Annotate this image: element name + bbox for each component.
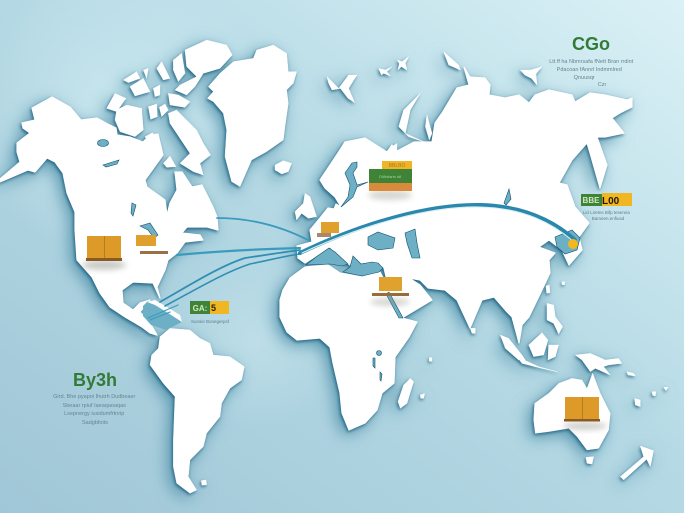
crate: North America small (136, 235, 168, 254)
caption: Caribbean price tag: Sunsie Bonegerpsf (191, 319, 230, 324)
Caribbean Sea (143, 301, 182, 330)
Caspian Sea (405, 229, 420, 258)
Madagascar (398, 378, 425, 408)
African lakes (376, 350, 382, 356)
Red Sea (386, 292, 403, 318)
Greenland (207, 45, 297, 187)
label: Caribbean price tag: GA: (193, 304, 207, 313)
Baltic Sea (341, 162, 368, 207)
crate: Scandinavia green panel: Oiifirdarts tdl (379, 174, 401, 179)
North America (0, 97, 218, 335)
label: Japan price tag (581, 193, 632, 207)
Planes and birds (327, 57, 542, 103)
label: Japan price tag: L00 (602, 196, 620, 207)
text block: CGo description: Qnuusqr (574, 75, 595, 81)
Arctic islands (107, 40, 232, 175)
text block: By3h description: Gird. Bhe pyapoi Ihutrh Dudbeaer (53, 394, 136, 400)
text block: By3h description: Sadgbfoits (82, 420, 108, 426)
heading: CGo: CGo (572, 34, 610, 54)
label: Japan price tag: BBE (583, 196, 600, 205)
routes (148, 205, 575, 320)
British Isles (295, 193, 317, 220)
caption: Japan price tag: Lid Liretns Bifp tesereia (583, 210, 630, 215)
inland seas and lakes (98, 140, 580, 381)
crate: Europe (317, 222, 339, 237)
Southeast Asia and Oceania (429, 282, 668, 464)
Lake Baikal (504, 189, 511, 205)
crate: North America large (82, 236, 126, 270)
route: Caribbean to Europe, lower (165, 254, 300, 306)
North American lakes (98, 140, 108, 146)
label: Caribbean price tag: 5 (211, 303, 216, 313)
Cuba (147, 300, 182, 322)
text block: By3h description: Sbeaar rpiuf Iaeaqaoaqas (63, 403, 126, 409)
Africa (280, 265, 417, 430)
crate: Middle East (370, 277, 410, 306)
heading: By3h: By3h (73, 370, 117, 390)
crate: Scandinavia green panel (368, 161, 412, 200)
route: Caribbean to Europe, upper (160, 250, 300, 302)
route: North America to Europe, middle (177, 248, 300, 255)
Novaya Zemlya and northern islands (392, 52, 460, 155)
text block: By3h description: Lsepnergy iusidumfrtnrip (64, 411, 124, 417)
marker: yellow dot (568, 239, 578, 249)
South America (150, 328, 244, 493)
Eurasia (297, 67, 632, 343)
route: North America to Europe, north (217, 218, 310, 241)
Japan bay (555, 230, 580, 254)
label: Caribbean price tag (190, 301, 229, 314)
crate: Scandinavia green panel: BBLBO (389, 163, 405, 169)
crate: Australia (563, 397, 607, 430)
arrow: plane lower right (620, 446, 654, 480)
text block: CGo description: Pdacoan fAnnrl Indmmlred (557, 67, 622, 73)
Mediterranean Sea, east (343, 256, 383, 276)
caption: Japan price tag: Bameen.enfiusd (592, 216, 625, 221)
text block: CGo description: Ltt ff ha Nbmrsafa fNett Bran rrdint (549, 59, 634, 65)
text block: CGo description: Czr (598, 82, 606, 88)
route: Caribbean local (148, 305, 178, 320)
Black Sea (368, 232, 395, 250)
route: Europe to Japan (300, 205, 575, 253)
Mediterranean Sea, west (306, 248, 348, 266)
